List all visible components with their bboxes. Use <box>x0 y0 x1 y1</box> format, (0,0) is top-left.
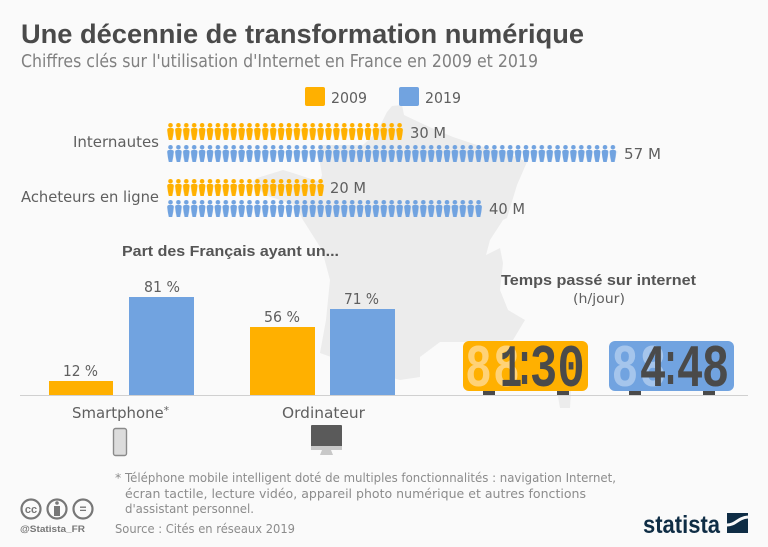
footnote: * <box>115 470 121 485</box>
clock: 2019: 8 <box>640 336 666 404</box>
clock: 2009: : <box>513 334 536 402</box>
clock: 2009: 8 <box>465 336 492 404</box>
bar chart: device ownership: 71 % <box>344 290 379 308</box>
bar chart: device ownership: 56 % <box>264 308 300 326</box>
unit label: (h/jour) <box>573 291 625 307</box>
pictogram chart: Internautes: Internautes <box>73 133 159 151</box>
footnote: écran tactile, lecture vidéo, appareil photo numérique et autres fonctions <box>125 486 586 501</box>
clock: 2009: 1 <box>500 336 522 404</box>
heading: device ownership: Part des Français ayant un... <box>122 243 339 260</box>
pictogram chart: Acheteurs en ligne: Acheteurs en ligne <box>21 188 159 206</box>
clock: 2009: 8 <box>493 336 520 404</box>
bar chart: device ownership <box>49 278 395 396</box>
bar chart: device ownership: 12 % <box>63 362 98 380</box>
clock: 2019: 4 <box>640 336 666 404</box>
pictogram chart: Internautes: 57 M <box>624 145 661 163</box>
clock: 2019: 4 <box>677 336 703 404</box>
pictogram chart: Internautes <box>73 123 661 163</box>
category label: Ordinateur: Ordinateur <box>282 404 366 422</box>
clock: 2019 <box>609 334 734 404</box>
clock: 2019: : <box>659 334 682 402</box>
licence icons: = <box>79 502 87 516</box>
footnote: Téléphone mobile intelligent doté de multiples fonctionnalités : navigation Internet, <box>124 470 616 485</box>
legend <box>305 87 461 107</box>
legend: 2009 <box>331 89 367 107</box>
statista logo: statista <box>643 511 721 539</box>
icon: smartphone <box>114 428 126 456</box>
category label: Smartphone: * <box>164 404 169 417</box>
pictogram chart: Internautes: 30 M <box>410 124 446 142</box>
licence icons <box>22 500 92 518</box>
footnote <box>115 470 616 516</box>
source: Source : Cités en réseaux 2019 <box>115 521 295 536</box>
clock: 2019: 8 <box>612 336 638 404</box>
title: Une décennie de transformation numérique <box>21 19 584 49</box>
footnote: d'assistant personnel. <box>125 501 254 516</box>
pictogram chart: Acheteurs en ligne: 20 M <box>330 179 366 197</box>
licence icons: cc <box>25 504 37 516</box>
heading: time online: Temps passé sur internet <box>501 272 696 289</box>
handle: @Statista_FR <box>20 524 86 534</box>
clock: 2009: 3 <box>530 336 557 404</box>
clock: 2009: 0 <box>557 336 585 404</box>
clock: 2009 <box>463 334 588 404</box>
category label: Smartphone: Smartphone <box>72 404 167 422</box>
bar chart: device ownership: 81 % <box>144 278 180 296</box>
subtitle: Chiffres clés sur l'utilisation d'Internet en France en 2009 et 2019 <box>21 52 538 72</box>
background map of France <box>252 105 571 408</box>
clock: 2019: 8 <box>702 336 729 404</box>
pictogram chart: Acheteurs en ligne <box>21 179 525 218</box>
icon: computer monitor <box>311 425 342 455</box>
legend: 2019 <box>425 89 461 107</box>
pictogram chart: Acheteurs en ligne: 40 M <box>489 200 525 218</box>
